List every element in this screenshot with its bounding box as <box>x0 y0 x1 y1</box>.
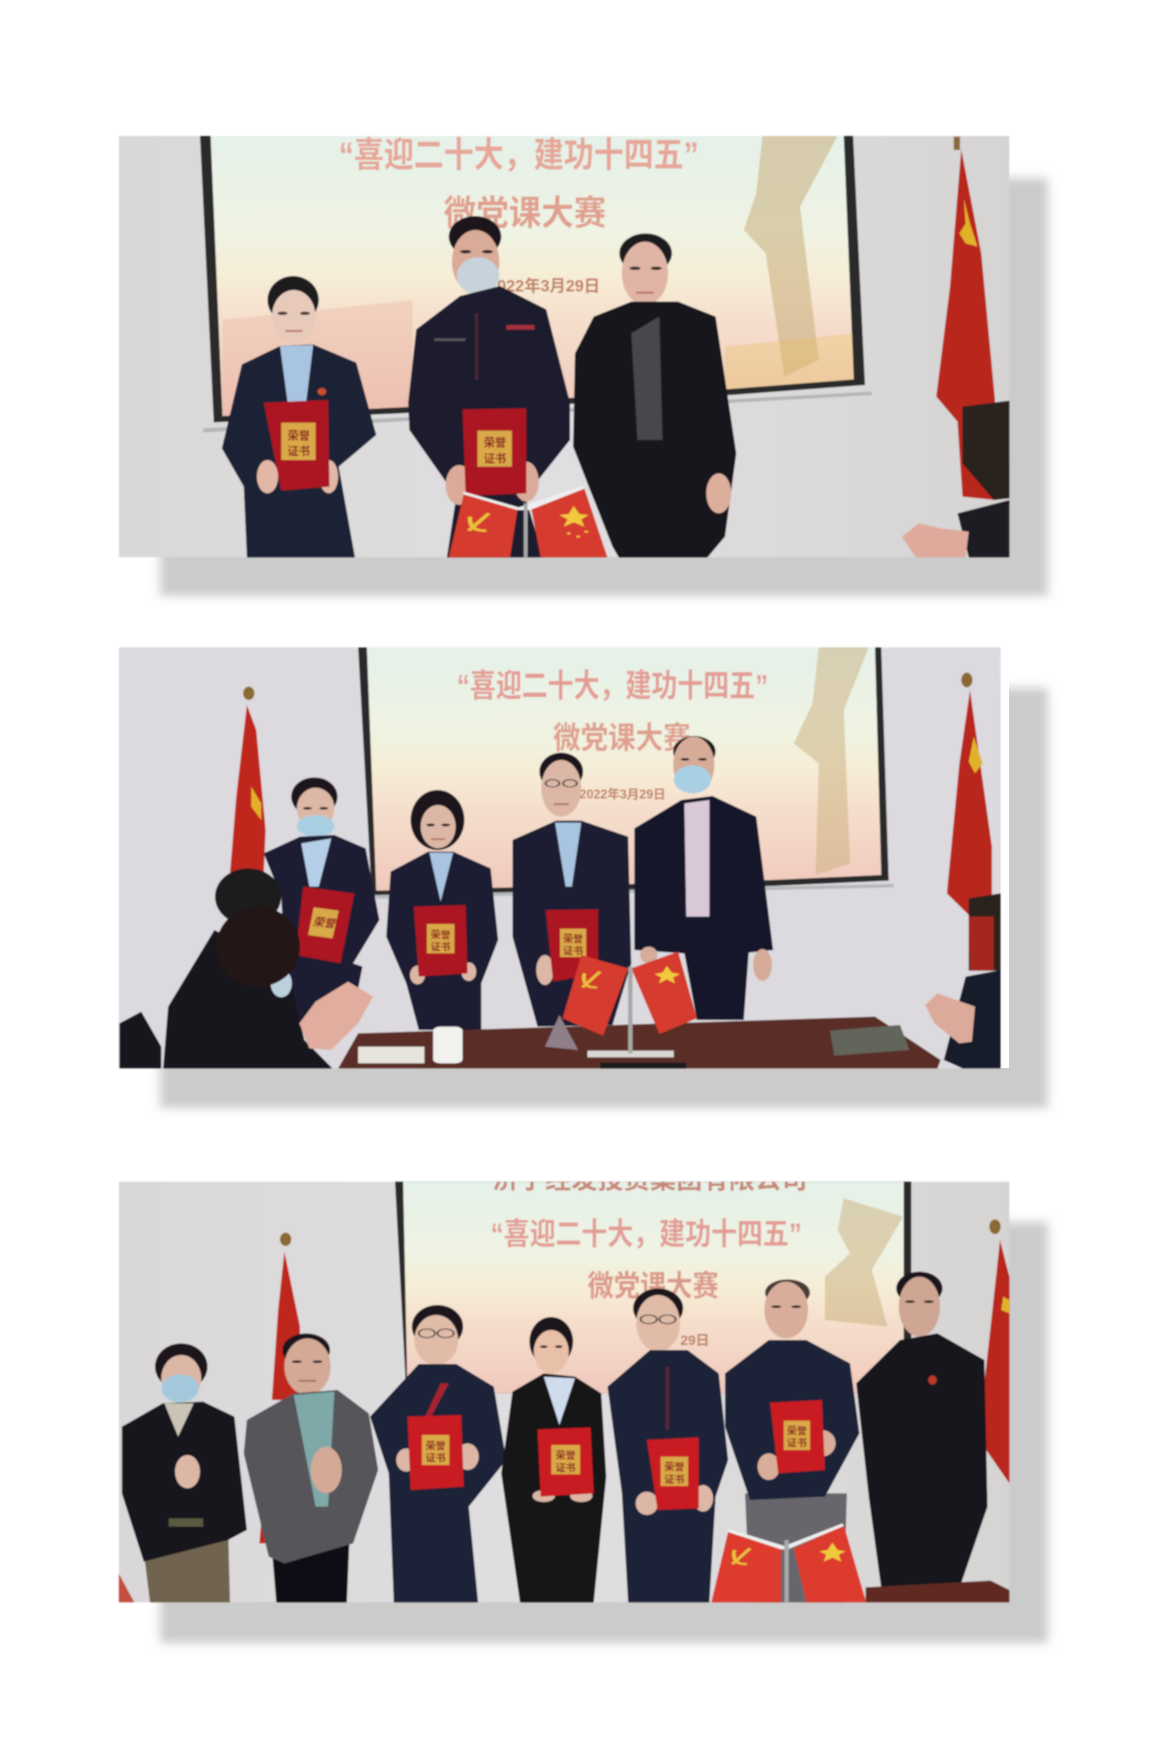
certificate 9: 证书 <box>787 1437 807 1450</box>
screen date 1: 2022年3月29日 <box>488 277 600 296</box>
photo panel 1: three award attendees <box>119 135 1009 557</box>
photo panel 2: four attendees at conference table <box>119 647 1001 1068</box>
table flags <box>711 1523 866 1602</box>
applauding guest right <box>925 970 1001 1068</box>
person: masked woman with certificate <box>264 777 379 1030</box>
screen subtitle 2: 微党课大赛 <box>553 721 691 756</box>
certificate 3 <box>296 887 354 963</box>
screen date 3: 29日 <box>680 1333 709 1348</box>
red badge lower left <box>119 1573 134 1602</box>
certificate 1: 荣誉 <box>288 428 310 442</box>
national flag right <box>936 137 1009 500</box>
photo collage page <box>118 134 1053 1648</box>
certificate 7: 证书 <box>556 1461 576 1474</box>
projection screen 1 <box>200 135 872 432</box>
certificate 6 <box>408 1415 464 1490</box>
certificate 5 <box>546 909 598 982</box>
person: young man with glasses <box>370 1305 506 1602</box>
table edge <box>866 1581 1009 1602</box>
certificate 4 <box>414 905 468 977</box>
certificate 3: 荣誉 <box>312 915 339 931</box>
photo panel 3: seven attendees <box>119 1164 1009 1602</box>
person: masked woman clapping <box>122 1343 247 1602</box>
person: man in uniform with mask <box>408 216 570 557</box>
certificate 8 <box>647 1437 699 1510</box>
drop shadow: photo 3 <box>160 1222 1048 1643</box>
projection screen 3 <box>395 1164 911 1393</box>
certificate 8: 证书 <box>664 1473 684 1486</box>
certificate 1 <box>264 400 329 491</box>
applauding hands right <box>902 500 1009 557</box>
certificate 7 <box>538 1427 594 1497</box>
person: woman with certificate <box>222 276 376 557</box>
certificate 2 <box>462 408 526 496</box>
person: man in uniform with glasses <box>608 1288 728 1602</box>
national flag right <box>947 673 1001 971</box>
certificate 5: 证书 <box>563 945 583 958</box>
person: masked man in dark jacket <box>634 736 773 1020</box>
table flags <box>449 486 608 557</box>
screen header partial: 济宁经发投资集团有限公司 <box>493 1164 807 1194</box>
certificate 8: 荣誉 <box>664 1461 684 1474</box>
certificate 6: 荣誉 <box>426 1439 446 1452</box>
certificate 9: 荣誉 <box>787 1424 807 1437</box>
seated applauding guests left <box>119 868 373 1068</box>
person: man in black coat <box>573 233 736 557</box>
screen title 2: “喜迎二十大，建功十四五” <box>457 668 768 704</box>
table flags <box>562 952 697 1053</box>
person: man in black jacket <box>856 1272 988 1588</box>
national flag left <box>230 687 266 873</box>
drop shadow: photo 2 <box>160 688 1048 1108</box>
screen title 1: “喜迎二十大，建功十四五” <box>339 135 699 175</box>
certificate 4: 荣誉 <box>431 928 451 941</box>
person: woman with bob hair <box>386 790 498 1030</box>
white mat right of photo 2 <box>1000 647 1009 1068</box>
projection screen 2 <box>358 647 894 899</box>
certificate 2: 荣誉 <box>484 436 506 450</box>
person: man with glasses <box>512 753 631 1027</box>
person: bald man in uniform <box>725 1279 859 1602</box>
screen subtitle 1: 微党课大赛 <box>444 194 606 233</box>
certificate 4: 证书 <box>431 941 451 954</box>
certificate 7: 荣誉 <box>556 1449 576 1462</box>
drop shadow: photo 1 <box>160 178 1048 596</box>
conference table <box>338 1015 941 1068</box>
screen subtitle 3: 微党课大赛 <box>588 1269 719 1302</box>
certificate 2: 证书 <box>484 451 506 465</box>
certificate 9 <box>770 1400 825 1473</box>
certificate 5: 荣誉 <box>563 933 583 946</box>
national flag right <box>978 1219 1009 1483</box>
person: man in grey blazer clapping <box>244 1333 378 1602</box>
certificate 6: 证书 <box>426 1452 446 1465</box>
national flag left <box>259 1233 300 1543</box>
screen date 2: 2022年3月29日 <box>580 786 666 801</box>
person: young woman in black suit <box>501 1317 606 1602</box>
certificate 1: 证书 <box>288 444 310 458</box>
screen title 3: “喜迎二十大，建功十四五” <box>491 1216 802 1251</box>
